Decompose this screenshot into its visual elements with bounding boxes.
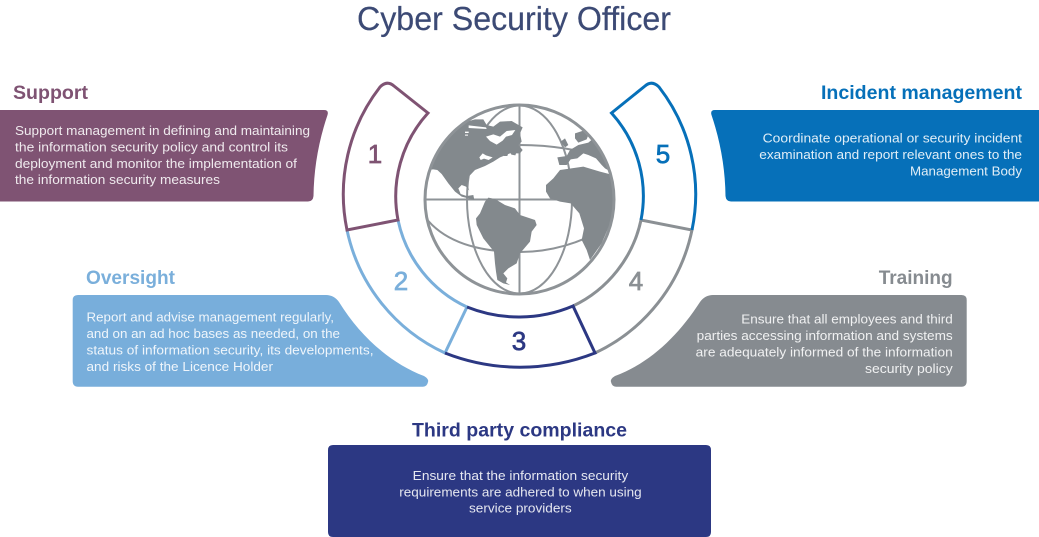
newfoundland islands [504,153,516,156]
panel: training [611,268,967,387]
training text: security policy [865,362,953,376]
training text: are adequately informed of the information [696,346,953,360]
third party text [399,469,642,516]
third party text: service providers [469,502,572,516]
globe outline [425,105,614,294]
oversight text: and on an ad hoc bases as needed, on the [86,327,340,341]
globe grid [426,106,582,292]
training box [611,295,967,387]
support heading: Support [13,83,89,104]
third party text: requirements are adhered to when using [399,486,642,500]
ring segment 1: 1 [368,139,382,169]
oversight text [86,311,374,374]
support text: deployment and monitor the implementation of [15,157,298,171]
ring segment 5 [612,83,696,230]
land masses [425,119,620,285]
oversight text: status of information security, its developments, [86,344,374,358]
incident text [759,132,1023,178]
support text: Support management in defining and maintaining [15,124,310,138]
ring segment 4: 4 [629,266,643,296]
incident text: Management Body [910,164,1023,178]
panel: oversight [73,268,428,387]
third party heading: Third party compliance [412,421,627,442]
ring segment 4 [573,220,692,353]
support text: the information security measures [15,173,220,187]
ring segment 2 [347,220,467,353]
support text: the information security policy and control its [15,140,288,154]
training text: parties accessing information and systems [697,329,953,343]
ring segment 5: 5 [656,139,670,169]
third party box [328,445,711,537]
europe [557,131,608,170]
ring segment 3 [445,306,595,367]
panel: incident management [711,83,1039,202]
oversight box [73,295,428,387]
panel: third party compliance [328,421,711,537]
north america [425,119,523,200]
title: Cyber Security Officer [357,0,671,37]
support box [0,110,328,202]
third party text: Ensure that the information security [413,469,629,483]
ring segment 2: 2 [394,266,408,296]
incident heading: Incident management [821,83,1023,104]
south america [476,198,537,285]
incident text: Coordinate operational or security incident [763,132,1023,146]
africa [546,167,620,260]
incident box [711,110,1039,202]
panel: support [0,83,328,202]
oversight text: Report and advise management regularly, [86,311,334,325]
training text [696,313,953,376]
training text: Ensure that all employees and third [741,313,953,327]
oversight text: and risks of the Licence Holder [86,360,273,374]
incident text: examination and report relevant ones to the [759,148,1022,162]
ring segment 1 [343,83,428,230]
ring segment 3: 3 [512,326,526,356]
training heading: Training [879,268,953,289]
oversight heading: Oversight [86,268,176,289]
bays and lakes [465,125,515,160]
globe [425,105,620,294]
support text [15,124,310,187]
